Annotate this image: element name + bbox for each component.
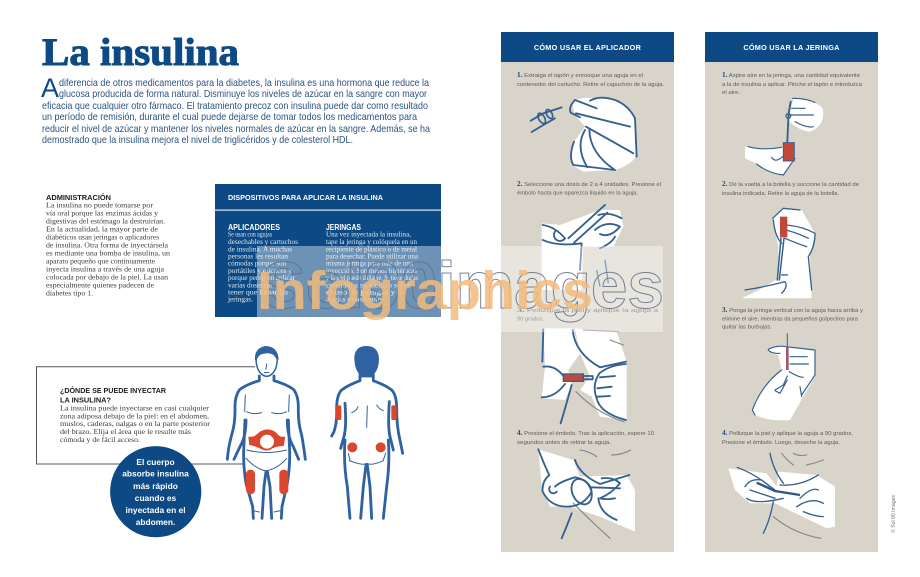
column: aplicadores: porque permiten aplicar — [228, 274, 296, 282]
callout circle: más rápido — [133, 481, 178, 491]
column: jeringas: y la piel puede dañarse. Si tiene dudas — [326, 274, 418, 282]
column: jeringas: Una vez inyectada la insulina, — [326, 230, 411, 238]
injection zone: arms — [336, 405, 341, 420]
step 3 text: 90 grados. — [517, 316, 544, 322]
column: jeringas: para desechar. Puede utilizar una — [326, 252, 419, 260]
column: aplicadores: portátiles y eficaces y — [228, 267, 292, 275]
text block: administración — [46, 193, 170, 298]
step 3 text: elimine el aire, mientras da pequeños golpecitos para — [722, 316, 859, 322]
illustration: step 4 — [538, 449, 635, 538]
step 4 text: 4. Pellizque la piel y aplique la aguja a 90 grados. — [722, 429, 853, 437]
text block: administración: En la actualidad, la mayor parte de — [46, 224, 159, 234]
step 2 text: émbolo hasta que aparezca líquido en la aguja. — [517, 190, 638, 196]
column: jeringas: el uso de jeringas y de — [326, 288, 406, 296]
callout circle: cuando es — [135, 493, 177, 503]
step 4 text — [517, 429, 654, 446]
text block: administración: diabetes tipo 1. — [46, 288, 93, 298]
step 1 text: 1. Extraiga el tapón y enrosque una aguja en el — [517, 71, 643, 79]
illustration: step 3 — [542, 328, 627, 423]
text block: administración: vía oral porque las enzimas ácidas y — [46, 208, 158, 218]
column: aplicadores: jeringas. — [227, 296, 253, 304]
column: jeringas: JERINGAS — [326, 223, 362, 232]
step 1 text: 1. Aspire aire en la jeringa, una cantidad equivalente — [722, 71, 860, 79]
text block: dónde inyectar: del brazo. Elija el área que le resulte más — [60, 427, 191, 436]
intro text block: un período de remisión, durante el cual puede dejarse de tomar todos los medicamentos para — [42, 112, 417, 123]
text block: administración: colocada por debajo de la piel. La usan — [46, 272, 168, 282]
callout circle: abdomen. — [136, 517, 175, 527]
column: jeringas: recipiente de plástico o de metal — [326, 246, 417, 254]
step 3 text: 3. Pellizque la piel y aplique la aguja a — [517, 306, 659, 314]
intro text block: diferencia de otros medicamentos para la diabetes, la insulina es una hormona que reduce la — [59, 78, 429, 89]
watermark: Sol90images — [262, 248, 664, 322]
injection zone: thighs — [246, 470, 255, 494]
step 2 text — [517, 180, 661, 196]
injection zone: hips — [347, 442, 357, 452]
panel heading: CÓMO USAR EL APLICADOR — [534, 43, 642, 52]
title: La insulina — [42, 31, 239, 74]
column: aplicadores: APLICADORES — [228, 223, 281, 232]
text block: administración: diabéticos usan jeringas o aplicadores — [46, 232, 159, 242]
watermark: Infographics — [257, 261, 593, 321]
step 2 text: insulina indicada. Retire la aguja de la botella. — [722, 191, 839, 197]
step 1 text — [722, 71, 863, 96]
column: aplicadores: Se usan con agujas — [228, 230, 272, 238]
text block: administración: ADMINISTRACIÓN — [46, 193, 111, 202]
column: jeringas: misma jeringa para más de una — [326, 260, 414, 268]
column: jeringas: tape la jeringa y colóquela en un — [326, 238, 417, 246]
column: aplicadores — [227, 223, 298, 304]
text block: administración: aparato pequeño que continuamente — [46, 256, 156, 266]
step 1 text: el aire. — [722, 90, 740, 96]
step 2 text — [722, 180, 859, 197]
text block: administración: La insulina no puede tomarse por — [46, 200, 154, 210]
column: jeringas: consulte a su médico sobre — [326, 282, 411, 290]
step 3 text: quitar las burbujas. — [722, 324, 772, 330]
text block: administración: digestivas del estómago la destruirían. — [46, 216, 165, 226]
callout circle — [110, 446, 201, 537]
step 1 text — [517, 71, 664, 88]
panel heading: CÓMO USAR LA JERINGA — [743, 43, 840, 52]
step 1 text: a la de insulina a aplicar. Pinche el tapón e introduzca — [722, 82, 863, 88]
text block: dónde inyectar: LA INSULINA? — [60, 396, 111, 404]
intro text block: reducir el nivel de azúcar y mantener los niveles normales de azúcar en la sangre. Además, se ha — [42, 124, 430, 135]
intro text block — [41, 73, 430, 146]
column: aplicadores: varias dosis sin — [228, 282, 272, 290]
illustration: step 2 — [742, 208, 815, 298]
step 4 text: 4. Presione el émbolo. Tras la aplicación, espere 10 — [517, 429, 654, 437]
figure: body back — [332, 346, 403, 518]
column: aplicadores: tener que llenar las — [228, 288, 288, 296]
illustration: step 2 — [542, 205, 623, 290]
intro text block: eficacia que cualquier otro fármaco. El tratamiento precoz con insulina puede dar como resultado — [42, 101, 428, 112]
column: aplicadores: desechables y cartuchos — [228, 238, 298, 246]
step 3 text — [722, 306, 863, 330]
panel: dispositivos — [215, 184, 441, 317]
illustration: step 3 — [752, 333, 815, 420]
illustration: step 4 — [728, 453, 835, 538]
column: aplicadores: de insulina. A muchas — [228, 246, 292, 254]
step 2 text: 2. Dé la vuelta a la botella y succione la cantidad de — [722, 180, 859, 188]
text block: administración: de insulina. Otra forma de inyectársela — [46, 240, 169, 250]
panel heading: DISPOSITIVOS PARA APLICAR LA INSULINA — [228, 193, 383, 202]
intro text block: glucosa producida de forma natural. Disminuye los niveles de azúcar en la sangre con mayor — [59, 89, 427, 100]
text block: administración: especialmente quienes padecen de — [46, 280, 155, 290]
callout frame — [36, 367, 255, 464]
credit: © Sol 90 Images — [890, 495, 897, 533]
text block: dónde inyectar: La insulina puede inyectarse en casi cualquier — [60, 404, 210, 412]
text block: dónde inyectar: muslos, caderas, nalgas o en la parte posterior — [60, 419, 211, 428]
panel: cómo usar el aplicador — [501, 32, 674, 552]
column: jeringas — [326, 223, 419, 304]
step 2 text: 2. Seleccione una dosis de 2 a 4 unidades. Presione el — [517, 180, 661, 188]
text block: dónde inyectar: zona adiposa debajo de la piel: en el abdomen, — [60, 412, 209, 420]
step 3 text: 3. Ponga la jeringa vertical con la aguja hacia arriba y — [722, 306, 863, 314]
step 4 text: Presione el émbolo. Luego, deseche la aguja. — [722, 440, 840, 446]
panel: cómo usar la jeringa — [705, 32, 878, 552]
callout circle: absorbe insulina — [122, 468, 189, 478]
column: aplicadores: personas les resultan — [228, 252, 288, 260]
injection zone: abdomen — [248, 429, 285, 451]
text block: dónde inyectar — [60, 386, 211, 444]
step 1 text: contenedor del cartucho. Retire el capuchón de la aguja. — [517, 82, 664, 88]
callout circle: El cuerpo — [136, 457, 175, 467]
step 3 text — [517, 306, 659, 322]
text block: dónde inyectar: cómoda y de fácil acceso. — [60, 435, 140, 444]
text block: administración: inyecta insulina a través de una aguja — [46, 264, 165, 274]
illustration: step 1 — [745, 98, 823, 175]
illustration: step 1 — [531, 98, 637, 172]
text block: administración: es mediante una bomba de insulina, un — [46, 248, 170, 258]
step 4 text: segundos antes de retirar la aguja. — [517, 440, 611, 446]
intro text block: demostrado que la insulina mejora el nivel de triglicéridos y de colesterol HDL. — [42, 135, 353, 146]
column: jeringas: agujas desechables. — [326, 296, 386, 304]
column: aplicadores: cómodas porque son — [228, 260, 286, 268]
figure: body front — [227, 346, 305, 518]
text block: dónde inyectar: ¿DÓNDE SE PUEDE INYECTAR — [60, 386, 167, 395]
step 4 text — [722, 429, 853, 446]
intro text block: A — [41, 73, 59, 103]
column: jeringas: inyección. Son menos higiénicas — [326, 267, 417, 275]
callout circle: inyectada en el — [125, 505, 186, 515]
